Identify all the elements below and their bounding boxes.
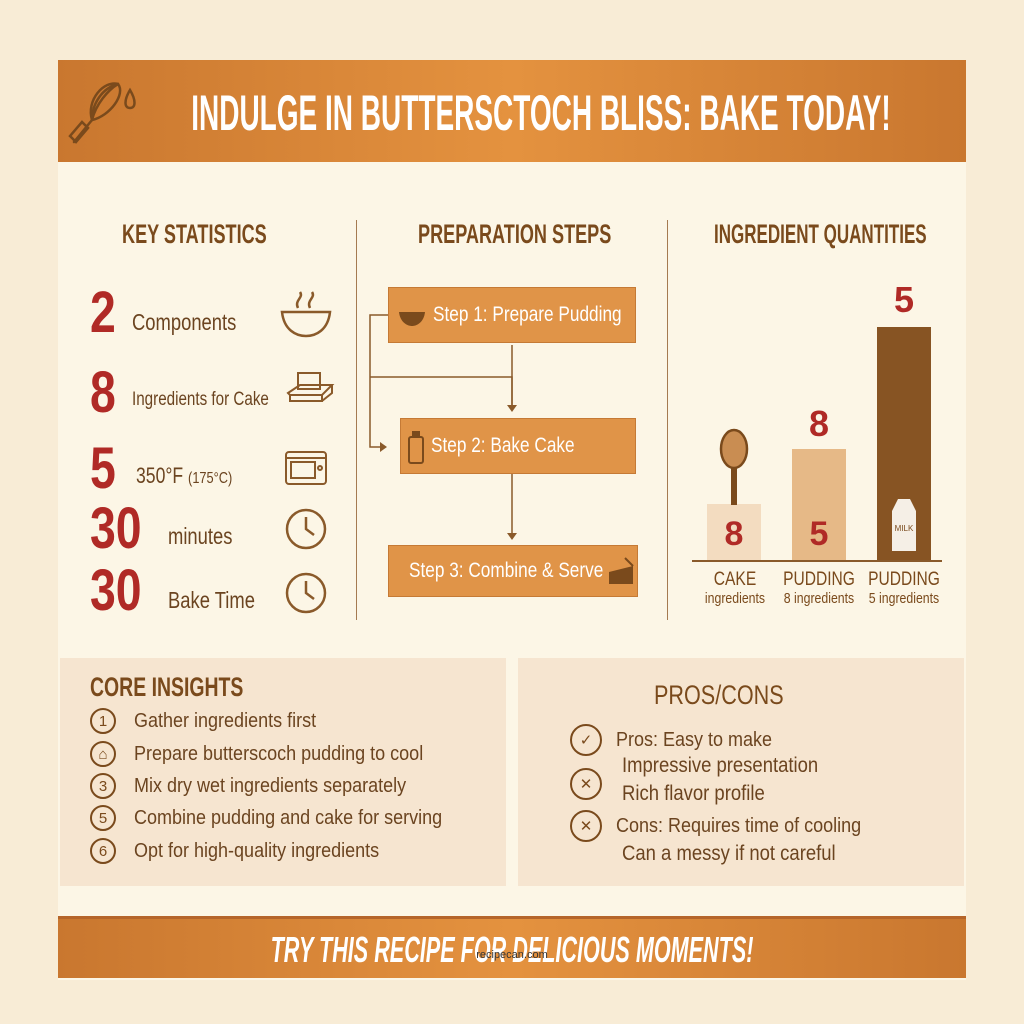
stat 4 [90, 496, 232, 561]
panel: pros/cons: ✕ [580, 776, 592, 793]
stat 4: minutes [168, 523, 232, 549]
icon: cake slice [609, 557, 634, 584]
step 2 [400, 418, 636, 474]
icon: oven [285, 451, 327, 485]
step 1: Step 1: Prepare Pudding [433, 303, 622, 326]
stat 5 [90, 558, 255, 623]
title: INDULGE IN BUTTERSCTOCH BLISS: BAKE TODAY! [191, 85, 891, 141]
panel: pros/cons: Rich flavor profile [622, 782, 765, 805]
stat 1: Components [132, 309, 236, 335]
stat 3 [90, 436, 232, 501]
heading: KEY STATISTICS [122, 219, 267, 249]
panel: core insights: Opt for high-quality ingredients [134, 840, 379, 862]
panel: pros/cons: Cons: Requires time of cooling [616, 814, 861, 836]
icon: bowl small [399, 312, 425, 326]
bar chart: CAKE [714, 569, 756, 590]
stat 1 [90, 280, 236, 345]
icon: clock 2 [286, 572, 326, 614]
bar chart: 8 [725, 515, 743, 553]
stat 1: 2 [90, 280, 116, 345]
stat 3: 350°F (175°C) [136, 463, 232, 488]
bar chart: PUDDING [868, 569, 940, 590]
panel: key statistics [90, 219, 334, 623]
footer text: TRY THIS RECIPE FOR DELICIOUS MOMENTS! [271, 929, 753, 970]
bar chart: PUDDING [783, 569, 855, 590]
icon: bottle [408, 431, 424, 464]
icon: whisk [68, 82, 136, 144]
bar chart: 5 [810, 515, 828, 553]
footer banner [58, 916, 966, 978]
step 3 [388, 545, 638, 597]
step 1 [388, 287, 636, 343]
panel: core insights: ⌂ [98, 746, 108, 762]
bar chart [692, 279, 942, 607]
stat 4: 30 [90, 496, 142, 561]
stat 3: 5 [90, 436, 116, 501]
panel: core insights: Combine pudding and cake for serving [134, 806, 442, 828]
stat 5: Bake Time [168, 587, 255, 613]
panel: pros/cons: ✕ [580, 818, 592, 835]
panel: preparation steps [369, 219, 638, 597]
bar chart: MILK [895, 524, 914, 533]
stat 2: Ingredients for Cake [132, 389, 269, 410]
icon: bowl [280, 291, 332, 338]
step 2: Step 2: Bake Cake [431, 434, 575, 457]
icon: butter [286, 372, 334, 402]
panel: pros/cons [518, 658, 964, 886]
stat 5: 30 [90, 558, 142, 623]
bar chart: 8 [809, 403, 829, 444]
panel: core insights: 1 [99, 712, 107, 730]
bar chart: ingredients [705, 590, 765, 607]
bar chart: 5 [894, 279, 914, 320]
footer banner: recipecan.com [476, 949, 548, 961]
heading: INGREDIENT QUANTITIES [714, 219, 927, 249]
main card [58, 60, 966, 980]
panel: core insights: Mix dry wet ingredients separately [134, 774, 406, 796]
panel: pros/cons: Impressive presentation [622, 754, 818, 777]
arrows [369, 314, 517, 540]
panel: core insights: Prepare butterscoch pudding to cool [134, 742, 423, 764]
step 3: Step 3: Combine & Serve [409, 559, 603, 582]
heading: PREPARATION STEPS [418, 219, 611, 249]
header banner [58, 60, 966, 162]
panel: core insights: Gather ingredients first [134, 710, 316, 732]
panel: core insights [60, 658, 506, 886]
panel: core insights: 6 [99, 842, 107, 860]
panel: core insights: 3 [99, 778, 107, 794]
heading: PROS/CONS [654, 680, 784, 710]
panel: pros/cons: ✓ [580, 732, 592, 749]
panel: core insights: 5 [99, 810, 107, 826]
panel: pros/cons: Pros: Easy to make [616, 728, 772, 750]
divider lines [356, 220, 357, 620]
bar chart: 8 ingredients [784, 590, 854, 607]
panel: pros/cons: Can a messy if not careful [622, 842, 836, 865]
icon: clock [286, 508, 326, 550]
stat 2 [90, 360, 269, 425]
stat 2: 8 [90, 360, 116, 425]
panel: ingredient quantities [692, 219, 942, 607]
bar chart: 5 ingredients [869, 590, 939, 607]
heading: CORE INSIGHTS [90, 672, 243, 702]
